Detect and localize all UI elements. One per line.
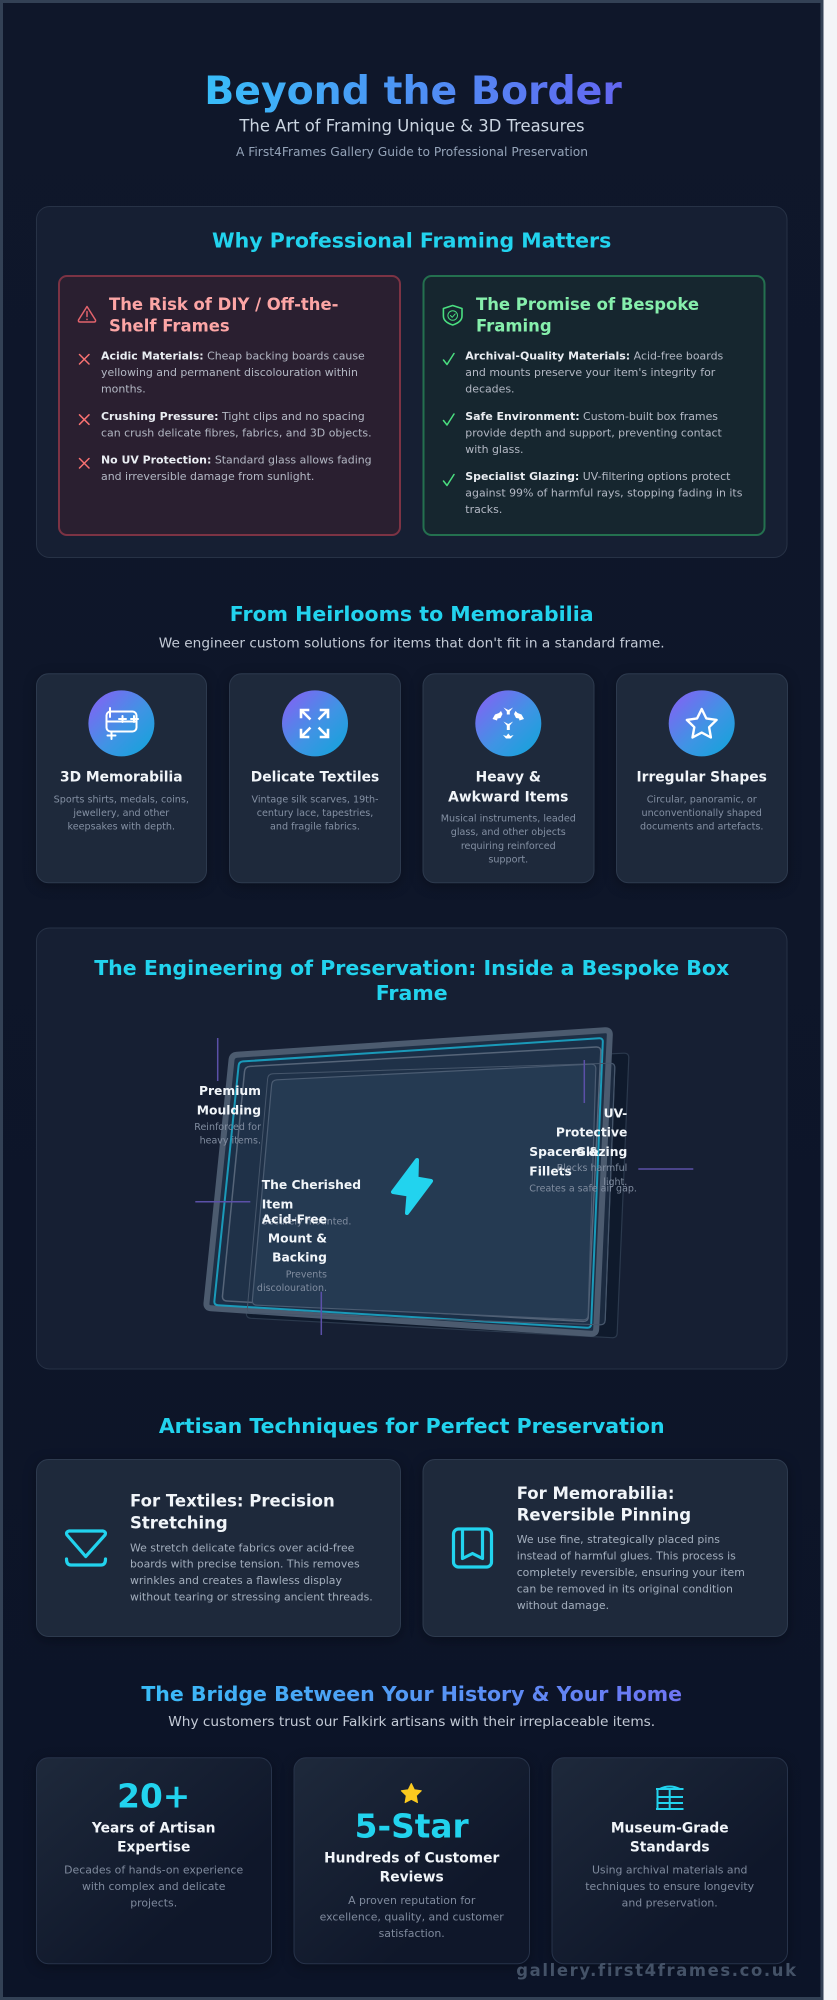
card title: Reversible Pinning [517,1505,691,1524]
card description: glass, and other objects [451,827,566,838]
stat description: projects. [130,1896,177,1909]
label: acid-free mount [257,1212,327,1294]
heading: risk: The Risk of DIY / Off-the- [109,295,338,314]
card: promise of bespoke [424,276,764,535]
list: risks: Crushing Pressure: [101,410,218,423]
card: 3D memorabilia [36,674,206,883]
label: premium moulding: heavy items. [200,1135,261,1146]
card description: without damage. [517,1599,609,1612]
heading: from heirlooms: From Heirlooms to Memorabilia [230,602,594,626]
list: risks: Cheap backing boards cause [207,349,365,362]
label: UV-protective glazing: Glazing [576,1145,627,1159]
card description: wrinkles and creates a flawless display [130,1574,342,1587]
heading: promise: Framing [476,316,552,335]
card: risk of DIY [59,276,400,535]
icon: bookmark box [454,1529,492,1567]
list: promises: tracks. [465,503,502,516]
card description: keepsakes with depth. [68,822,175,833]
stat label: Standards [630,1840,710,1856]
card description: jewellery, and other [72,808,169,819]
label: spacers and fillets [529,1145,637,1195]
stat number: 20+ [117,1778,190,1816]
list: promises: and mounts preserve your item's integrity for [465,366,716,379]
card title: Stretching [130,1513,228,1532]
list: promises [465,349,743,516]
card: heavy and awkward [423,674,594,883]
list: promises: Specialist Glazing: [465,470,579,483]
stat card: years of expertise [36,1758,272,1964]
list: promises: Safe Environment: [465,410,580,423]
stat label: Expertise [117,1840,190,1856]
card title: Irregular Shapes [636,770,767,786]
label: premium moulding [194,1084,261,1146]
stat description: excellence, quality, and customer [320,1910,504,1923]
card description: Circular, panoramic, or [647,794,757,805]
list: risks: and irreversible damage from sunlight. [101,470,314,483]
label: the cherished item: The Cherished [262,1178,361,1192]
card description: We use fine, strategically placed pins [517,1533,720,1546]
callout lines [195,1038,693,1335]
stat card: museum grade [552,1758,788,1964]
heading: engineering: Frame [376,981,448,1005]
icon: lightning bolt [393,1160,431,1213]
card: reversible pinning [423,1460,788,1636]
card: irregular shapes [616,674,788,883]
card title: Delicate Textiles [251,770,379,786]
card description: support. [488,855,528,866]
stat description: Using archival materials and [592,1863,747,1876]
stat label: Hundreds of Customer [324,1850,499,1866]
icon: heavy items [475,690,541,756]
panel: why professional framing matters [36,206,787,558]
stat description: with complex and delicate [82,1880,226,1893]
card description: century lace, tapestries, [257,808,373,819]
list: risks: Tight clips and no spacing [222,410,365,423]
icon: expand arrows [282,690,348,756]
stat label: Museum-Grade [611,1820,729,1836]
list: promises: decades. [465,382,515,395]
label: the cherished item: Securely mounted. [262,1216,351,1227]
list: promises: provide depth and support, preventing contact [465,427,723,440]
tagline: A First4Frames Gallery Guide to Professional Preservation [236,145,588,159]
card description: Vintage silk scarves, 19th- [252,794,378,805]
list: risks: can crush delicate fibres, fabrics, and 3D objects. [101,427,372,440]
title: Beyond the Border [204,68,622,114]
list: promises: Archival-Quality Materials: [465,349,630,362]
card title: 3D Memorabilia [60,770,183,786]
card description: unconventionally shaped [641,808,762,819]
label: acid-free mount: Prevents [286,1270,327,1281]
stat card: five star [294,1758,530,1964]
card description: Musical instruments, leaded [441,813,576,824]
icon: gold star [401,1784,421,1803]
heading: promise: The Promise of Bespoke [476,295,699,314]
card title: Awkward Items [448,789,568,805]
watermark: gallery.first4frames.co.uk [516,1961,798,1980]
stat description: and preservation. [622,1896,718,1909]
card description: completely reversible, ensuring your item [517,1566,745,1579]
icon: check marks [444,354,454,486]
card description: without tearing or stressing ancient threads. [130,1591,373,1604]
stat label: Reviews [380,1870,444,1886]
list: promises: Acid-free boards [634,349,723,362]
panel: engineering of preservation [36,928,787,1369]
list: risks: No UV Protection: [101,454,211,467]
list: promises: Custom-built box frames [583,410,718,423]
header [204,68,622,159]
list: risks: Standard glass allows fading [215,454,372,467]
list: risks: yellowing and permanent discolouration within [101,366,358,379]
card description: requiring reinforced [461,841,556,852]
stat description: techniques to ensure longevity [585,1880,755,1893]
card description: and fragile fabrics. [270,822,360,833]
label: UV-protective glazing: UV- [604,1106,627,1120]
label: the cherished item [262,1178,361,1227]
label: UV-protective glazing: light. [603,1177,627,1188]
stat label: Years of Artisan [91,1820,216,1836]
icon: shield check [443,306,462,325]
icon: star outline [669,690,735,756]
list: risks [101,349,372,483]
card description: Sports shirts, medals, coins, [54,794,189,805]
stat description: satisfaction. [379,1927,445,1940]
label: acid-free mount: Mount & [268,1231,327,1245]
card description: documents and artefacts. [640,822,763,833]
label: UV-protective glazing: Blocks harmful [557,1163,627,1174]
label: acid-free mount: Acid-Free [262,1212,327,1226]
label: acid-free mount: Backing [272,1250,327,1264]
label: UV-protective glazing [556,1106,627,1188]
card title: For Textiles: Precision [130,1492,335,1511]
card: precision stretching [36,1460,400,1636]
card description: boards with precise tension. This removes [130,1558,360,1571]
label: spacers and fillets: Creates a safe air gap. [529,1184,637,1195]
list: promises: against 99% of harmful rays, stopping fading in its [465,487,743,500]
icon: cross marks [80,354,89,468]
stat number: 5-Star [355,1808,470,1846]
icon: 3D memorabilia [88,690,154,756]
icon: stretching tray [66,1531,106,1565]
subtitle: The Art of Framing Unique & 3D Treasures [238,117,585,136]
list: promises: UV-filtering options protect [583,470,730,483]
label: acid-free mount: discolouration. [257,1283,327,1294]
label: spacers and fillets: Spacers & [529,1145,600,1159]
icon: warning triangle [78,306,96,322]
list: risks: Acidic Materials: [101,349,204,362]
card description: can be removed in its original condition [517,1583,733,1596]
heading: the bridge: The Bridge Between Your History & Your Home [141,1682,682,1706]
heading: engineering: The Engineering of Preservation: Inside a Bespoke Box [94,956,729,980]
card: delicate textiles [230,674,400,883]
card title: For Memorabilia: [517,1484,674,1503]
card description: instead of harmful glues. This process is [517,1550,736,1563]
heading: risk: Shelf Frames [109,316,230,335]
label: spacers and fillets: Fillets [529,1164,572,1178]
stat description: Decades of hands-on experience [64,1863,244,1876]
label: premium moulding: Moulding [197,1103,261,1117]
subheading: the bridge: Why customers trust our Falkirk artisans with their irreplaceable items. [168,1714,655,1730]
label: premium moulding: Reinforced for [194,1122,261,1133]
heading: artisan techniques: Artisan Techniques for Perfect Preservation [159,1414,665,1438]
icon: museum building [656,1786,684,1809]
subheading: heirlooms: We engineer custom solutions for items that don't fit in a standard frame. [159,635,665,651]
list: risks: months. [101,382,146,395]
label: premium moulding: Premium [199,1084,261,1098]
label: UV-protective glazing: Protective [556,1126,627,1140]
heading: why professional framing: Why Professional Framing Matters [212,228,611,252]
stat description: A proven reputation for [348,1894,476,1907]
diagram: exploded box frame [206,1030,629,1338]
label: the cherished item: Item [262,1197,293,1211]
list: promises: with glass. [465,443,524,456]
card description: We stretch delicate fabrics over acid-free [130,1541,355,1554]
card title: Heavy & [476,770,541,786]
